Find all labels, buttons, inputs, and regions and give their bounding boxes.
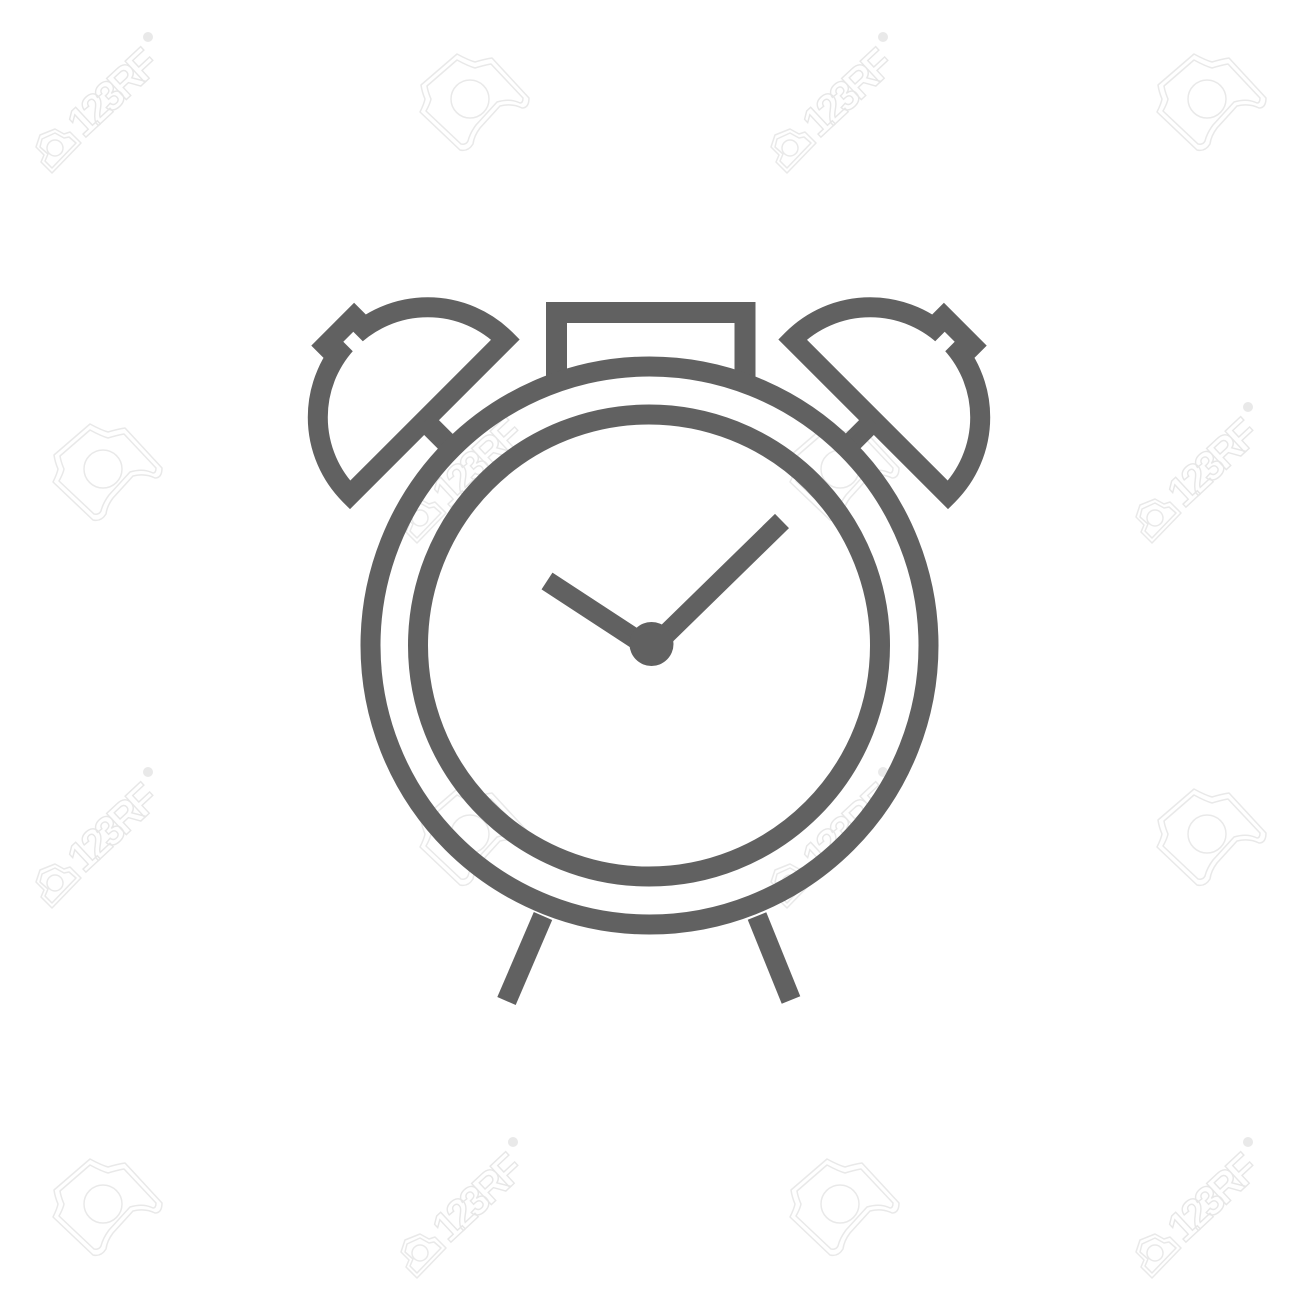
watermark: egg center	[790, 424, 899, 520]
icon: outer ring	[370, 366, 928, 924]
watermark: row 4	[53, 1137, 1268, 1278]
watermark: 123RF: 123RF	[423, 409, 533, 516]
watermark: 123RF right	[1136, 402, 1268, 543]
watermark: 123RF right: 123RF	[1158, 409, 1268, 516]
watermark: egg right	[1157, 54, 1266, 150]
icon: hour hand	[547, 581, 651, 649]
watermark: 123RF left	[36, 32, 168, 173]
icon: right bell	[792, 307, 980, 495]
watermark: 123RF center: 123RF	[793, 774, 903, 881]
watermark: egg	[420, 54, 529, 150]
watermark: egg	[420, 789, 529, 885]
watermark: egg	[53, 424, 162, 520]
watermark: 123RF left: 123RF	[58, 39, 168, 146]
icon: left bell	[318, 307, 506, 495]
watermark: egg center	[790, 1159, 899, 1255]
watermark: 123RF right	[1136, 1137, 1268, 1278]
icon: left leg	[506, 916, 543, 1001]
watermark: 123RF right: 123RF	[1158, 1144, 1268, 1251]
icon: right leg	[757, 916, 791, 1000]
watermark: row 3	[36, 767, 1266, 908]
watermark: 123RF: 123RF	[423, 1144, 533, 1251]
watermark: egg right	[1157, 789, 1266, 885]
watermark: 123RF right: 123RF	[793, 39, 903, 146]
watermark: 123RF left: 123RF	[58, 774, 168, 881]
watermark: 123RF	[401, 402, 533, 543]
watermark: 123RF	[401, 1137, 533, 1278]
watermark: egg	[53, 1159, 162, 1255]
watermark: 123RF right	[771, 32, 903, 173]
icon: top handle	[556, 312, 745, 385]
watermark: row 2	[53, 402, 1268, 543]
watermark: row 1	[36, 32, 1266, 173]
icon: clock face ring	[418, 414, 880, 876]
watermark: 123RF center	[771, 767, 903, 908]
watermark: 123RF left	[36, 767, 168, 908]
icon: minute hand	[651, 521, 782, 649]
alarm clock icon	[318, 307, 980, 1001]
icon: center hub	[630, 622, 674, 666]
